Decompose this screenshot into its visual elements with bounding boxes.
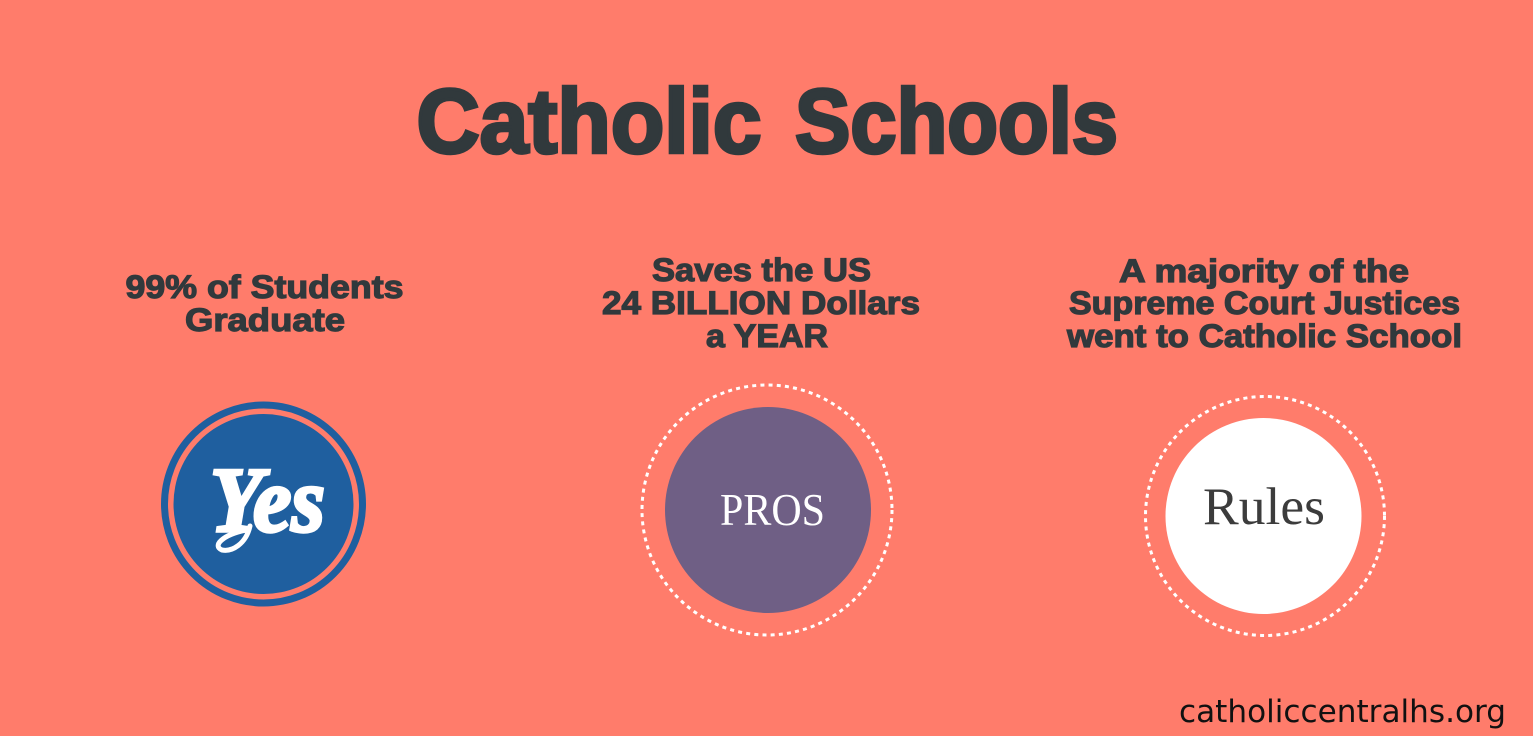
text block: savings statistic: Saves the US (652, 252, 871, 288)
badge: PROS (642, 385, 892, 635)
website url: catholiccentralhs.org (1179, 694, 1506, 730)
text block: graduation statistic: 99% of Students (126, 269, 404, 305)
text block: supreme court statistic: A majority of the (1119, 253, 1409, 289)
text block: supreme court statistic (1066, 253, 1462, 354)
text block: savings statistic: 24 BILLION Dollars (602, 285, 920, 321)
badge: Rules: Rules (1203, 478, 1325, 536)
title: Schools (795, 72, 1118, 172)
text block: savings statistic: a YEAR (706, 318, 828, 354)
title (416, 72, 1118, 172)
badge: Rules (1146, 396, 1384, 636)
badge: PROS: PROS (720, 485, 825, 535)
text block: graduation statistic: Graduate (185, 302, 345, 338)
text block: supreme court statistic: Supreme Court Justices (1069, 285, 1460, 321)
text block: supreme court statistic: went to Catholic School (1066, 318, 1462, 354)
text block: graduation statistic (126, 269, 404, 338)
text block: savings statistic (602, 252, 920, 354)
badge: Yes (164, 405, 362, 603)
badge: Yes: Yes (210, 449, 325, 551)
title: Catholic (416, 72, 762, 172)
